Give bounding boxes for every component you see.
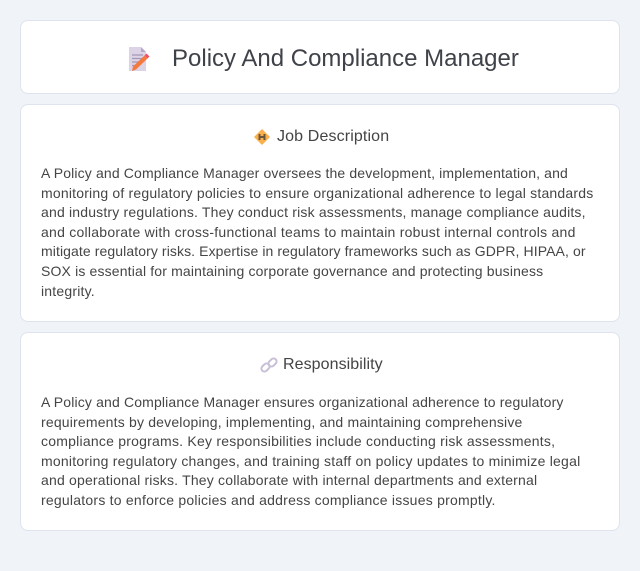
text block: responsibility: and operational risks. They collaborate with internal departments and external xyxy=(41,472,537,488)
panel: job description xyxy=(20,104,620,322)
text block: job description: integrity. xyxy=(41,283,95,299)
text block: responsibility: regulators to enforce policies and address compliance issues promptly. xyxy=(41,492,496,508)
text block: job description xyxy=(41,165,593,299)
text block: responsibility: monitoring regulatory changes, and training staff on policy updates to minimize legal xyxy=(41,453,580,469)
icon: document with pencil xyxy=(129,47,150,71)
text block: responsibility: compliance programs. Key responsibilities include conducting risk assessments, xyxy=(41,433,555,449)
panel: title card xyxy=(20,20,620,94)
text block: responsibility xyxy=(41,394,580,508)
icon: orange diamond xyxy=(254,129,270,145)
panel: responsibility xyxy=(20,332,620,531)
text block: responsibility: requirements by developing, implementing, and maintaining comprehensive xyxy=(41,414,522,430)
icon: chain link xyxy=(260,358,278,372)
text block: job description: monitoring of regulatory policies to ensure organizational adherence to legal standards xyxy=(41,185,593,201)
title: Policy And Compliance Manager xyxy=(172,45,519,72)
text block: job description: and industry regulations. They conduct risk assessments, manage compliance audits, xyxy=(41,204,586,220)
heading: responsibility: Responsibility xyxy=(283,356,383,373)
text block: job description: SOX is essential for maintaining corporate governance and protecting business xyxy=(41,263,543,279)
text block: job description: and collaborate with cross-functional teams to maintain robust internal controls and xyxy=(41,224,576,240)
text block: job description: mitigate regulatory risks. Expertise in regulatory frameworks such as GDPR, HIPAA, or xyxy=(41,243,586,259)
text block: responsibility: A Policy and Compliance Manager ensures organizational adherence to regulatory xyxy=(41,394,564,410)
heading: job description: Job Description xyxy=(277,128,389,145)
text block: job description: A Policy and Compliance Manager oversees the development, implementation, and xyxy=(41,165,568,181)
